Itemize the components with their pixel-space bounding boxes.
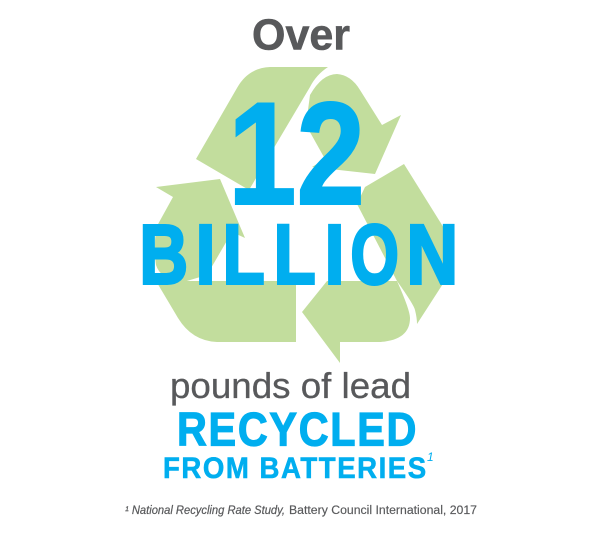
heading: RECYCLED: RECYCLED [177, 404, 416, 456]
heading: FROM BATTERIES: FROM BATTERIES [163, 452, 426, 485]
heading: BILLION: O [350, 207, 399, 302]
heading: BILLION: B [140, 208, 188, 302]
heading: BILLION: I [325, 207, 344, 302]
heading: Over: Over [252, 10, 350, 60]
number: 12: 12 [228, 72, 365, 235]
heading: BILLION: N [406, 207, 458, 302]
heading: BILLION: I [196, 207, 215, 302]
footnote: ¹ National Recycling Rate Study, [125, 505, 285, 517]
footnote: Battery Council International, 2017 [289, 505, 477, 517]
arrow: right [357, 164, 453, 324]
recycling symbol [155, 67, 453, 363]
text: pounds of lead: pounds of lead [170, 365, 411, 406]
arrow: top right [306, 74, 401, 174]
footnote marker: 1 [427, 450, 434, 464]
arrow: bottom right [302, 281, 410, 363]
footnote [125, 505, 477, 517]
heading: BILLION [140, 207, 458, 302]
arrow: bottom left [156, 281, 296, 342]
heading: BILLION: L [223, 208, 265, 302]
arrow: top left [196, 67, 328, 190]
arrow: left [155, 179, 245, 283]
heading: BILLION: L [274, 208, 316, 302]
